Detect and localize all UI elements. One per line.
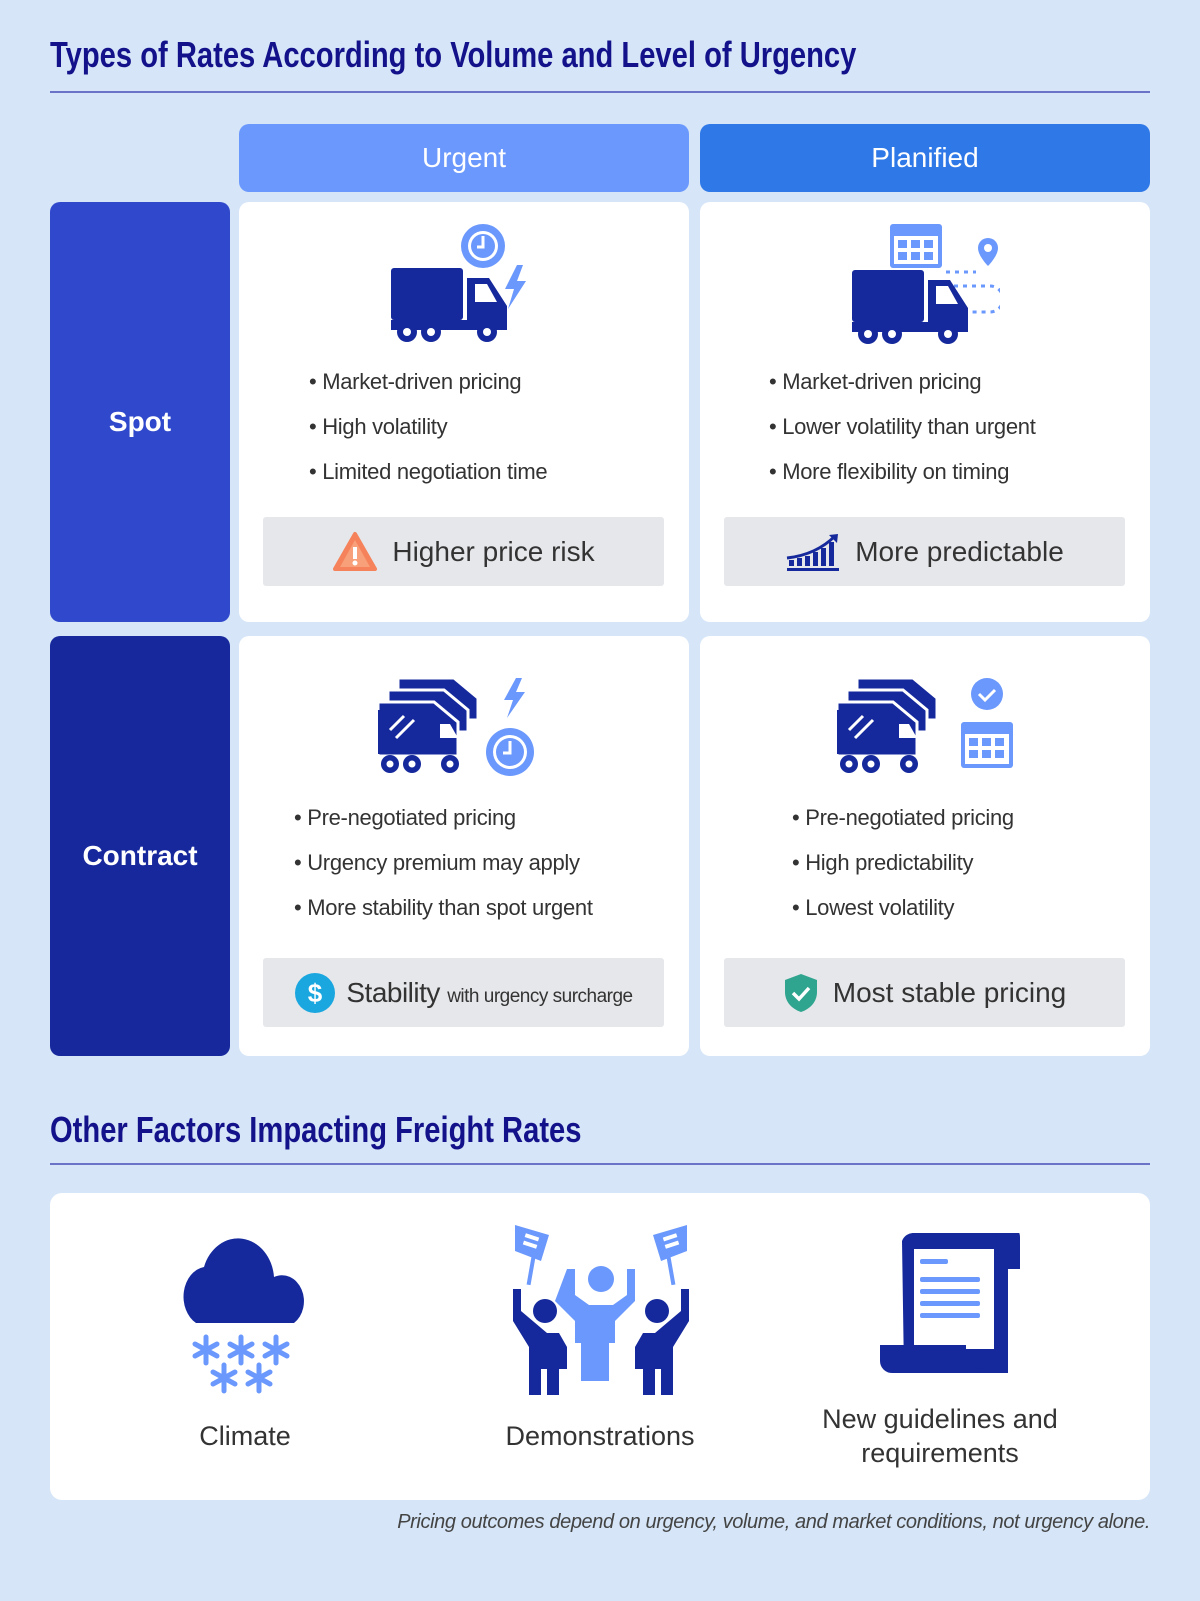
label: new guidelines	[822, 1404, 1058, 1468]
panel: spot urgent: • Market-driven pricing	[309, 369, 521, 394]
icon: snow cloud	[184, 1238, 304, 1394]
panel: spot planified: • More flexibility on timing	[769, 459, 1009, 484]
callout: more predictable: More predictable	[855, 536, 1064, 566]
panel: spot urgent: • Limited negotiation time	[309, 459, 547, 484]
label: demonstrations: Demonstrations	[505, 1421, 695, 1451]
panel: contract urgent: • Pre-negotiated pricing	[294, 805, 516, 830]
callout: higher price risk: Higher price risk	[392, 536, 595, 566]
icon: truck with calendar and route	[852, 224, 1000, 344]
panel: contract urgent: • More stability than spot urgent	[294, 895, 593, 920]
icon: fleet with lightning and clock	[378, 678, 534, 776]
panel: other factors	[50, 1193, 1150, 1500]
title: Types of Rates According to Volume and Level of Urgency	[50, 34, 856, 75]
panel: contract planified: • Lowest volatility	[792, 895, 954, 920]
panel: spot planified: • Market-driven pricing	[769, 369, 981, 394]
icon: scroll document	[880, 1233, 1020, 1373]
callout: most stable pricing: Most stable pricing	[833, 976, 1066, 1008]
footnote: Pricing outcomes depend on urgency, volume, and market conditions, not urgency alone.	[397, 1511, 1150, 1533]
row label: contract: Contract	[82, 840, 198, 871]
panel: spot urgent: • High volatility	[309, 414, 447, 439]
panel: contract urgent	[239, 636, 689, 1056]
panel: spot urgent	[239, 202, 689, 622]
panel: spot planified: • Lower volatility than urgent	[769, 414, 1036, 439]
icon: fleet with check and calendar	[837, 678, 1013, 773]
panel: contract planified: • High predictability	[792, 850, 973, 875]
callout: stability with urgency surcharge: $	[308, 978, 323, 1008]
panel: contract planified: • Pre-negotiated pricing	[792, 805, 1014, 830]
panel: contract urgent: • Urgency premium may apply	[294, 850, 580, 875]
callout: stability with urgency surcharge: Stability with urgency surcharge	[346, 976, 633, 1008]
callout: more predictable	[724, 517, 1125, 586]
header: planified: Planified	[871, 142, 979, 173]
label: new guidelines: New guidelines and	[822, 1404, 1058, 1434]
header: urgent	[239, 124, 689, 192]
label: new guidelines: requirements	[861, 1438, 1019, 1468]
callout: higher price risk	[263, 517, 664, 586]
icon: truck with clock	[391, 224, 526, 342]
panel: contract planified	[700, 636, 1150, 1056]
panel: spot planified	[700, 202, 1150, 622]
header: urgent: Urgent	[422, 142, 506, 173]
row label: contract	[50, 636, 230, 1056]
header: planified	[700, 124, 1150, 192]
callout: most stable pricing	[724, 958, 1125, 1027]
label: climate: Climate	[199, 1421, 291, 1451]
row label: spot	[50, 202, 230, 622]
callout: stability with urgency surcharge	[263, 958, 664, 1027]
row label: spot: Spot	[109, 406, 171, 437]
heading: other factors: Other Factors Impacting Freight Rates	[50, 1109, 581, 1150]
icon: demonstrations	[513, 1225, 689, 1395]
